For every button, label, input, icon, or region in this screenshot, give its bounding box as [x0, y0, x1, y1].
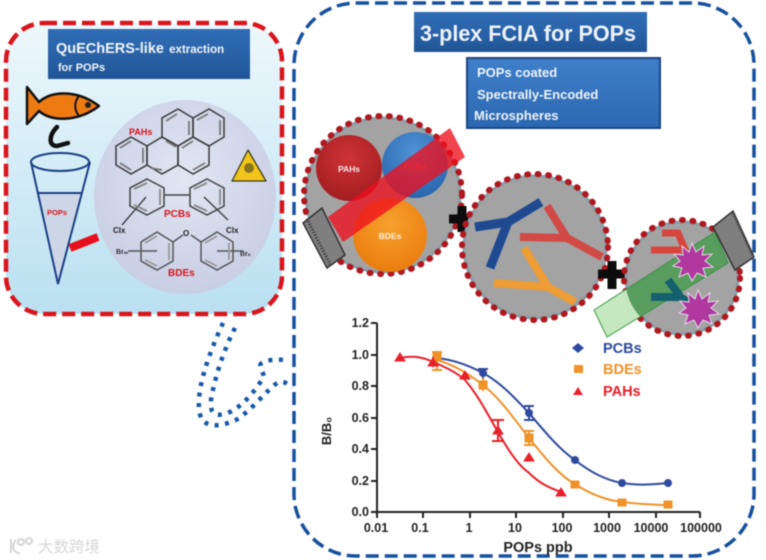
molecule: PCBs: Clx — [113, 226, 126, 235]
antibody: red fragment — [651, 233, 686, 252]
x axis: 1 — [466, 521, 473, 535]
x axis: POPs ppb — [503, 540, 573, 556]
panel: 3-plex FCIA — [294, 3, 754, 556]
icon: green laser detector — [713, 211, 754, 270]
watermark: 大数跨境 — [38, 537, 100, 556]
antibody: orange — [494, 248, 575, 302]
laser: green beam inside sphere — [626, 232, 728, 317]
molecule: BDEs: Brₘ — [116, 249, 129, 256]
panel: QuEChERS extraction — [6, 23, 282, 314]
chart: competition curves — [319, 316, 722, 556]
label box: POPs coated microspheres: Spectrally-Encoded — [477, 87, 598, 102]
legend: PAHs — [603, 384, 641, 400]
bead: PCBs: PCBs — [404, 161, 427, 171]
dotted connector — [199, 323, 292, 425]
antibody: teal fragment — [651, 280, 688, 302]
antibody: blue — [475, 202, 541, 268]
molecule: PCBs: PCBs — [164, 209, 191, 220]
heading: QuEChERS-like extraction: for POPs — [58, 62, 105, 74]
icon: extraction tube — [31, 153, 90, 284]
antibody: red — [520, 206, 602, 257]
legend — [572, 341, 642, 400]
molecule: PAHs — [116, 109, 224, 174]
molecule: BDEs: O — [183, 229, 189, 238]
icon: curved arrow — [51, 127, 68, 146]
x axis: 1000 — [593, 521, 621, 535]
microsphere 1: coated POPs — [303, 116, 465, 274]
bead: PAHs: PAHs — [338, 164, 360, 174]
y axis: B/B₀ — [319, 417, 334, 445]
bead: PCBs — [382, 132, 448, 198]
arrow: tube to molecules — [70, 237, 98, 248]
microsphere 3: detection — [594, 211, 754, 337]
watermark — [11, 537, 100, 556]
icon: red laser detector — [303, 208, 345, 268]
heading: 3-plex FCIA for POPs — [414, 12, 647, 52]
fluorophore: lower — [679, 290, 719, 328]
molecule: PCBs — [113, 179, 239, 235]
y axis: 0.6 — [352, 411, 369, 425]
y axis — [319, 316, 377, 519]
x axis: 0.01 — [364, 521, 388, 535]
y axis: 0.2 — [352, 474, 369, 488]
series: PAHs — [395, 353, 566, 496]
bead: BDEs: BDEs — [379, 231, 402, 241]
series: PCBs — [434, 354, 672, 486]
x axis: 0.1 — [411, 521, 429, 535]
plus sign 2 — [598, 261, 626, 289]
plus sign 1 — [449, 206, 475, 232]
icon: extraction tube: POPs — [47, 208, 67, 217]
heading: QuEChERS-like extraction: QuEChERS-like extraction — [56, 41, 224, 57]
x axis: 10 — [508, 521, 522, 535]
icon: hazard triangle — [232, 150, 266, 181]
x axis: 100000 — [680, 521, 722, 535]
label box: POPs coated microspheres: POPs coated — [477, 65, 557, 80]
y axis: 1.0 — [352, 348, 369, 362]
y axis: 0.8 — [352, 379, 369, 393]
molecule: BDEs — [116, 229, 251, 279]
panel: molecule circle — [94, 100, 276, 294]
bead: BDEs — [353, 198, 427, 272]
y axis: 1.2 — [352, 316, 369, 330]
heading: QuEChERS-like extraction — [48, 29, 250, 79]
molecule: PAHs: PAHs — [129, 127, 152, 137]
series: BDEs — [432, 352, 672, 508]
microsphere 2: antibodies — [462, 174, 608, 320]
heading: 3-plex FCIA for POPs: 3-plex FCIA for POPs — [420, 21, 636, 46]
label box: POPs coated microspheres — [467, 58, 660, 128]
fluorophore: upper — [673, 243, 713, 281]
bead: PAHs — [316, 135, 382, 201]
x axis: 100 — [552, 521, 572, 535]
legend: BDEs — [603, 362, 642, 378]
molecule: BDEs: Brₙ — [240, 251, 251, 258]
molecule: BDEs: BDEs — [168, 268, 195, 279]
y axis: 0.4 — [352, 442, 369, 456]
legend: PCBs — [603, 341, 642, 357]
label box: POPs coated microspheres: Microspheres — [474, 108, 559, 123]
x axis: 10000 — [634, 521, 668, 535]
icon: fish — [27, 87, 99, 124]
x axis — [364, 512, 722, 556]
laser: green beam outside sphere — [594, 232, 728, 337]
laser: red beam — [328, 128, 465, 242]
y axis: 0.0 — [352, 505, 369, 519]
molecule: PCBs: Clx — [226, 226, 239, 235]
